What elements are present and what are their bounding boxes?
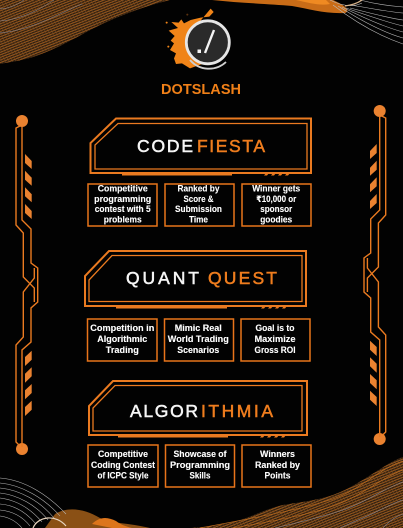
card: algorithmic trading: Trading: [106, 345, 139, 355]
panel: Quant Quest: [85, 251, 310, 361]
card: winners: Points: [264, 470, 291, 480]
heading: CodeFiesta: [137, 136, 265, 156]
card: contest style: Coding Contest: [91, 460, 155, 470]
card: winners: Winners: [260, 449, 295, 459]
card: ranking: Submission: [175, 204, 222, 214]
card: prize: [242, 184, 311, 226]
card: real world scenarios: World Trading: [168, 334, 229, 344]
heading: Quant Quest: QUEST: [208, 268, 277, 288]
heading: CodeFiesta: FIESTA: [197, 136, 265, 156]
card: contest format: Competitive: [98, 184, 148, 194]
heading: Algorithmia: [130, 401, 273, 421]
banner frame: Quant Quest: [85, 251, 306, 308]
card: real world scenarios: Mimic Real: [175, 323, 222, 333]
card: goal: Goal is to: [256, 323, 295, 333]
card: goal: [241, 319, 310, 361]
heading: Quant Quest: [126, 268, 277, 288]
card: prize: sponsor: [260, 204, 293, 214]
background wave: bottom left: [0, 478, 150, 528]
heading: CodeFiesta: CODE: [137, 136, 193, 156]
background wave: top left: [0, 0, 170, 64]
heading: Algorithmia: ITHMIA: [201, 401, 273, 421]
card: winners: Ranked by: [255, 460, 300, 470]
card: ranking: Ranked by: [178, 184, 220, 194]
card: contest format: contest with 5: [95, 204, 151, 214]
card: showcase: Showcase of: [174, 449, 227, 459]
card: prize: Winner gets: [252, 184, 300, 194]
card: real world scenarios: [164, 319, 234, 361]
card: contest style: of ICPC Style: [98, 470, 149, 480]
card: real world scenarios: Scenarios: [177, 345, 219, 355]
card: ranking: [165, 184, 234, 226]
card: algorithmic trading: Algorithmic: [97, 334, 147, 344]
banner frame: Algorithmia: [89, 381, 307, 438]
card: contest format: programming: [94, 194, 151, 204]
panel: CodeFiesta: [88, 118, 311, 226]
card: ranking: Score &: [184, 194, 214, 204]
card: ranking: Time: [189, 214, 208, 224]
card: contest format: [88, 184, 157, 226]
heading: Quant Quest: QUANT: [126, 268, 199, 288]
card: prize: goodies: [260, 214, 292, 224]
card: goal: Maximize: [254, 334, 296, 344]
card: prize: ₹10,000 or: [256, 194, 297, 204]
brand name: DOTSLASH: [161, 82, 241, 98]
card: contest style: Competitive: [98, 449, 148, 459]
card: goal: Gross ROI: [254, 345, 296, 355]
right circuit decoration: [364, 105, 386, 445]
card: winners: [242, 445, 311, 487]
icon: orange paint splash: [166, 9, 214, 68]
card: showcase: Programming: [170, 460, 230, 470]
panel: Algorithmia: [88, 381, 311, 487]
icon: dark disc with white ring: [186, 21, 229, 69]
card: algorithmic trading: Competition in: [90, 323, 154, 333]
banner frame: CodeFiesta: [90, 118, 311, 176]
heading: Algorithmia: ALGOR: [130, 401, 198, 421]
background wave: top right: [212, 0, 403, 44]
card: algorithmic trading: [88, 319, 157, 361]
card: showcase: Skills: [190, 470, 211, 480]
left circuit decoration: [16, 115, 38, 455]
card: contest format: problems: [104, 214, 142, 224]
card: contest style: [88, 445, 158, 487]
card: showcase: [166, 445, 234, 487]
logo icon: splash and ring with ./: [166, 9, 229, 69]
background wave: bottom right: [190, 457, 403, 528]
